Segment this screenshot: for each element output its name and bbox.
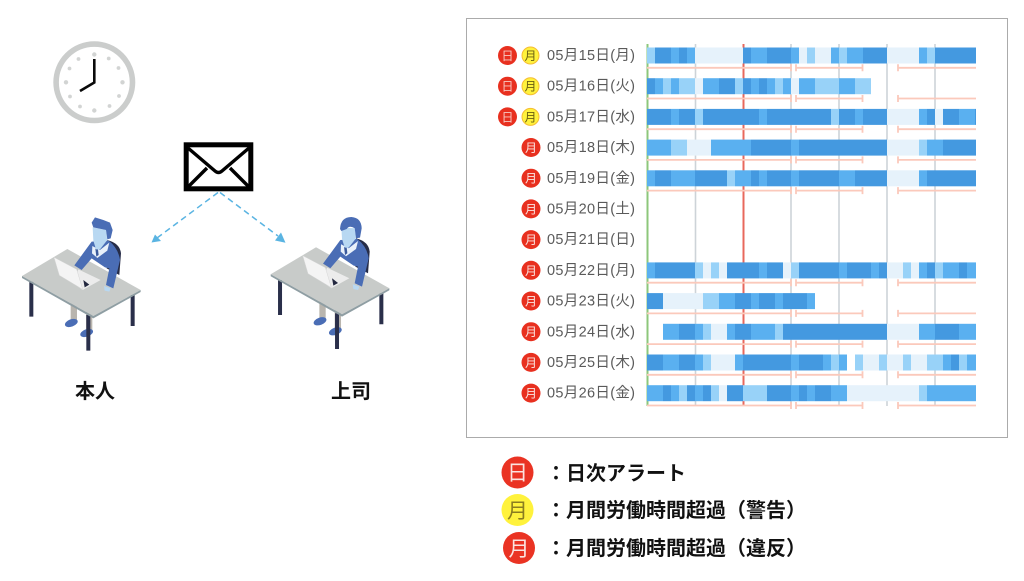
row labels: dates: 05月21日(日) bbox=[547, 232, 635, 248]
row labels: dates: 05月15日(月) bbox=[547, 48, 635, 64]
legend item: daily alert bbox=[502, 456, 686, 488]
row badges: alerts: 月 bbox=[525, 202, 537, 216]
legend item: daily alert: ：日次アラート bbox=[546, 462, 686, 485]
bars: 05/17 bbox=[647, 109, 976, 125]
row badges: alerts: 月 bbox=[525, 356, 537, 370]
bars: 05/23 bbox=[647, 293, 815, 309]
bars: 05/24 bbox=[663, 324, 976, 340]
legend bbox=[502, 456, 806, 564]
chart grid lines bbox=[648, 44, 935, 406]
row labels: dates: 05月19日(金) bbox=[547, 170, 635, 187]
bars: 05/26 bbox=[647, 385, 976, 401]
bars: 05/15 bbox=[647, 48, 976, 64]
legend item: monthly warning: ：月間労働時間超過（警告） bbox=[546, 499, 806, 522]
row labels: dates: 05月23日(火) bbox=[547, 294, 635, 310]
row badges: alerts: 月 bbox=[524, 110, 537, 124]
row badges: alerts: 日 bbox=[501, 110, 514, 124]
legend item: monthly violation bbox=[503, 532, 806, 564]
row badges: alerts: 月 bbox=[525, 172, 537, 186]
schedule range lines bbox=[647, 64, 976, 409]
row labels: dates: 05月20日(土) bbox=[547, 200, 635, 218]
legend item: daily alert: 日 bbox=[507, 462, 528, 485]
row labels: dates: 05月17日(水) bbox=[547, 108, 635, 125]
legend item: monthly violation: ：月間労働時間超過（違反） bbox=[546, 537, 806, 560]
bars: 05/22 bbox=[647, 262, 976, 278]
row labels: dates: 05月26日(金) bbox=[547, 385, 635, 402]
arrow: envelope to self bbox=[152, 192, 218, 242]
row badges: alerts: 月 bbox=[525, 141, 537, 155]
row badges: alerts: 月 bbox=[525, 294, 537, 308]
panel: attendance chart bbox=[466, 18, 1008, 438]
row badges: alerts: 月 bbox=[525, 233, 537, 247]
row badges: alerts: 日 bbox=[501, 49, 514, 63]
legend item: monthly warning: 月 bbox=[507, 500, 528, 523]
row labels: dates: 05月22日(月) bbox=[547, 263, 635, 279]
row badges: alerts: 月 bbox=[525, 264, 537, 278]
icon: clock bbox=[56, 44, 132, 120]
illustration: person at desk (manager) bbox=[271, 217, 389, 349]
illustration: person at desk (self) bbox=[22, 217, 141, 351]
arrow: envelope to manager bbox=[220, 192, 286, 243]
legend item: monthly violation: 月 bbox=[508, 538, 530, 561]
row badges: alerts: 日 bbox=[501, 80, 514, 94]
row labels: dates bbox=[547, 48, 635, 402]
icon: envelope bbox=[186, 145, 251, 189]
row labels: dates: 05月16日(火) bbox=[547, 79, 635, 95]
legend item: monthly warning bbox=[502, 494, 806, 526]
row badges: alerts bbox=[498, 46, 540, 403]
bars: 05/18 bbox=[647, 140, 976, 156]
row badges: alerts: 月 bbox=[525, 325, 537, 339]
label: manager: 上司 bbox=[331, 380, 371, 403]
bars: 05/16 bbox=[647, 78, 871, 94]
label: self: 本人 bbox=[75, 380, 115, 403]
row badges: alerts: 月 bbox=[524, 49, 537, 63]
row labels: dates: 05月25日(木) bbox=[547, 354, 635, 371]
bars: 05/25 bbox=[647, 354, 976, 370]
row labels: dates: 05月18日(木) bbox=[547, 139, 635, 156]
row badges: alerts: 月 bbox=[524, 80, 537, 94]
row labels: dates: 05月24日(水) bbox=[547, 323, 635, 340]
bars: 05/19 bbox=[647, 170, 976, 186]
row badges: alerts: 月 bbox=[525, 387, 537, 401]
